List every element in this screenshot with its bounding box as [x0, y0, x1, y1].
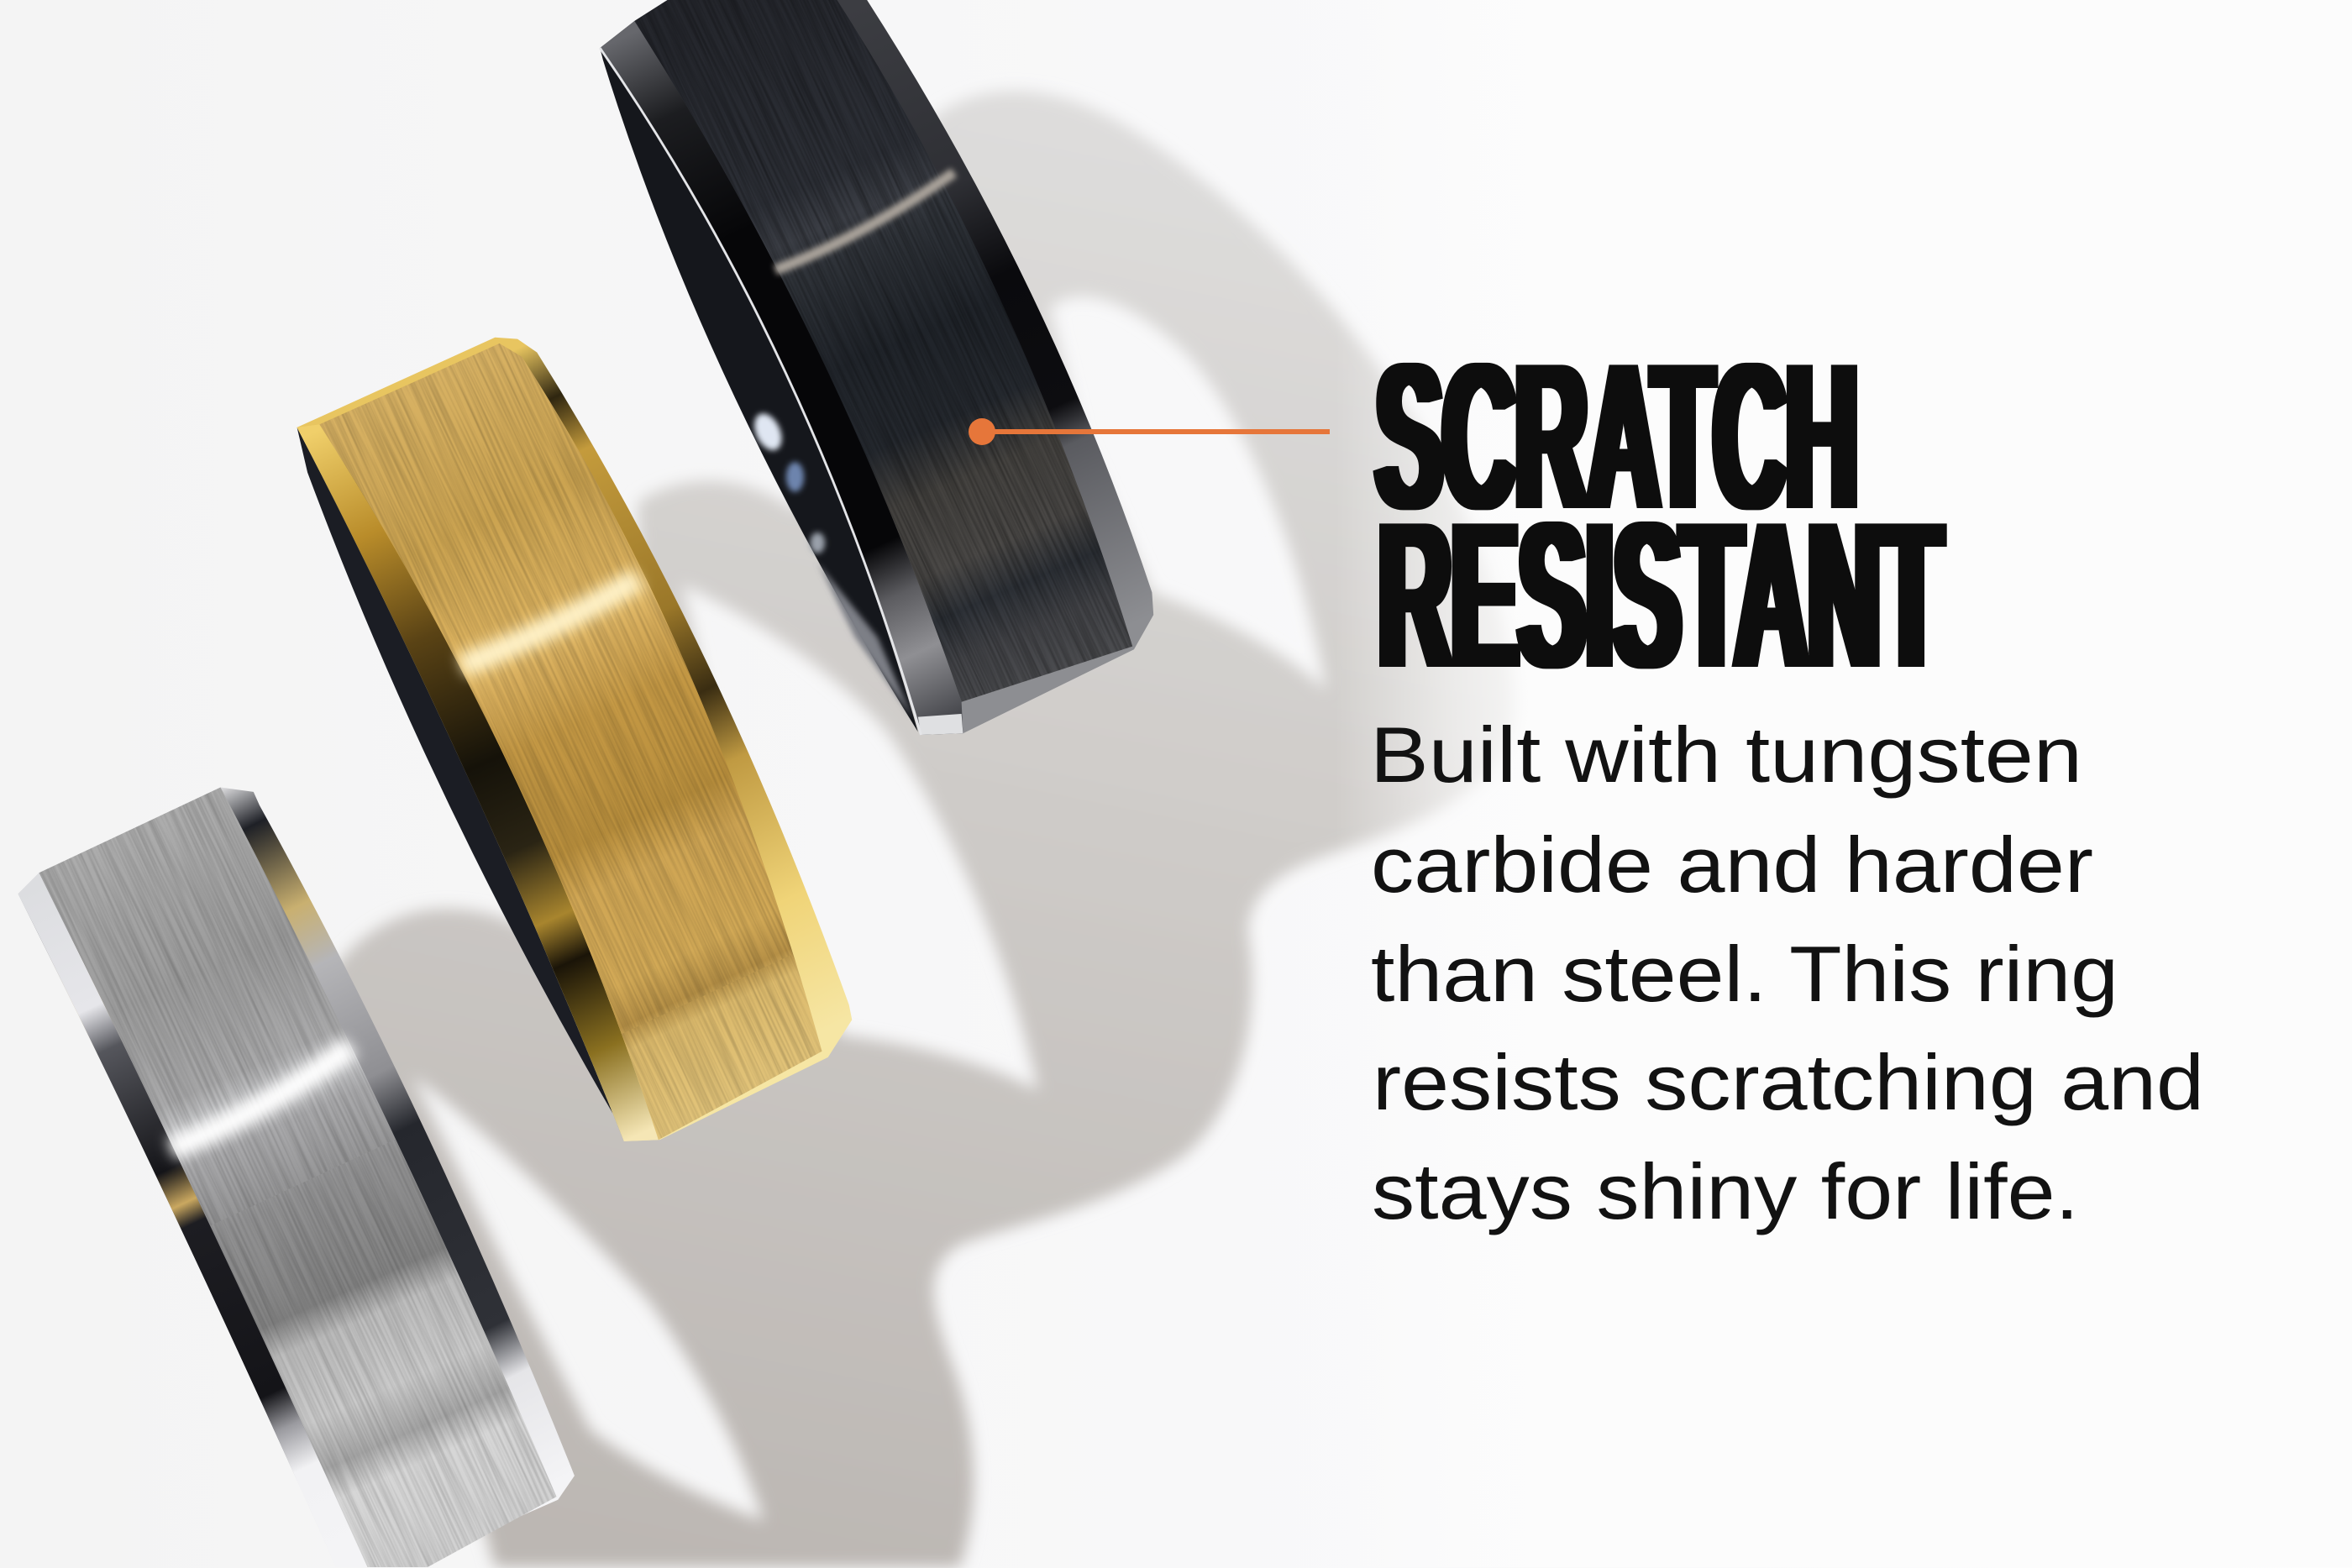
gold ring inner side	[297, 427, 624, 1141]
gold ring light band	[462, 579, 638, 666]
gold ring polished left bevel	[297, 424, 659, 1141]
black ring polished left bevel	[600, 21, 963, 735]
title	[1376, 319, 1942, 711]
callout: orange dot and leader line	[969, 418, 1330, 445]
black ring brushed face	[634, 0, 1132, 702]
silver ring polished left bevel	[18, 873, 367, 1567]
black ring silhouette and outer bevel	[600, 0, 1153, 735]
white fade behind the copy	[1335, 0, 1575, 1567]
ring: gold	[297, 338, 852, 1141]
black ring corner highlight	[918, 714, 963, 735]
body copy: Built with tungsten	[1370, 711, 2082, 799]
black ring inner side	[600, 48, 918, 732]
silver ring light band	[171, 1046, 351, 1149]
body copy: resists scratching and	[1373, 1038, 2204, 1126]
callout dot	[969, 418, 995, 445]
silver ring brushed texture	[39, 787, 556, 1567]
black ring thin bright edge	[600, 48, 921, 735]
title: SCRATCH	[1376, 319, 1858, 553]
silver ring silhouette and outer bevel	[18, 787, 575, 1567]
silver ring brushed face	[39, 787, 556, 1567]
black ring light band	[775, 172, 954, 270]
body copy: carbide and harder	[1371, 821, 2093, 909]
inner reflections	[749, 409, 912, 717]
gold ring silhouette and outer bevel	[297, 338, 852, 1141]
gold ring brushed face	[319, 343, 822, 1140]
gold ring brushed texture	[319, 343, 822, 1140]
ring: black	[600, 0, 1153, 735]
callout line	[982, 429, 1330, 434]
cast shadows of the rings	[330, 91, 1515, 1567]
body copy: stays shiny for life.	[1372, 1147, 2079, 1235]
ring: silver	[18, 787, 575, 1567]
body copy	[1370, 711, 2204, 1235]
body copy: than steel. This ring	[1371, 930, 2118, 1018]
black ring brushed texture	[634, 0, 1132, 702]
